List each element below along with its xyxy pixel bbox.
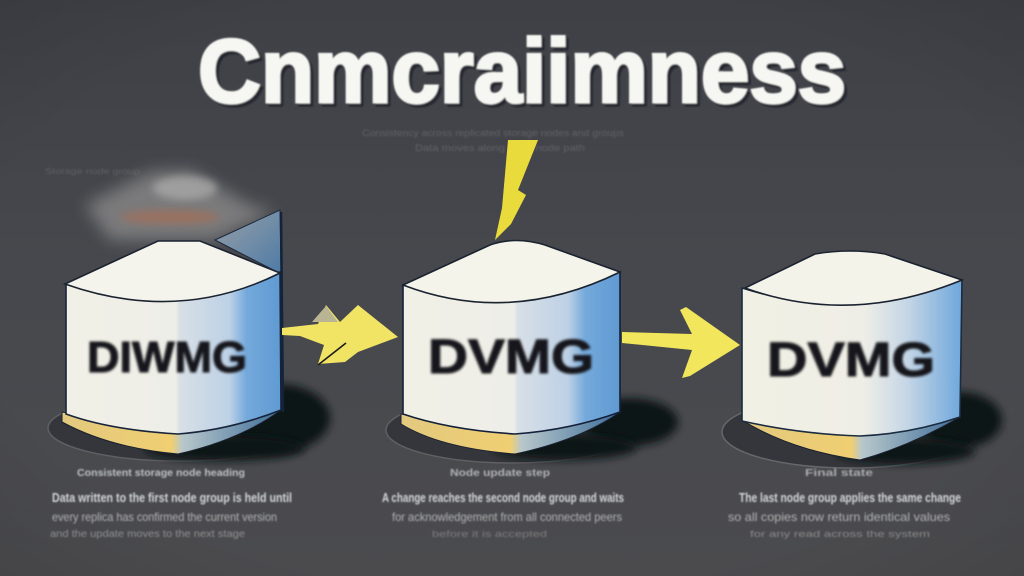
arrow 1: [282, 305, 398, 365]
caption column 3: [728, 468, 961, 539]
cube 1 front: [66, 272, 281, 434]
cube 2 label: DVMG: [428, 331, 594, 384]
arrow 2: [622, 307, 740, 378]
caption column 2: Node update step: [450, 468, 550, 479]
caption column 2: for acknowledgement from all connected peers: [392, 510, 622, 524]
subtitle: Consistency across replicated storage nodes and groups: [362, 128, 625, 138]
caption column 1: every replica has confirmed the current version: [52, 510, 277, 524]
subtitle: [362, 128, 625, 153]
cube 1 back face: [215, 210, 281, 274]
cube 1 label: DIWMG: [87, 333, 247, 382]
cube 3 top: [745, 251, 962, 305]
caption column 2: [382, 468, 624, 539]
cube 1 top: [65, 241, 280, 302]
title: Cnmcraiimness: [198, 22, 846, 122]
cube 2: [386, 240, 678, 463]
caption column 2: A change reaches the second node group and waits: [382, 490, 624, 505]
lightning bolt: [495, 140, 538, 240]
cube 3: [722, 251, 1002, 468]
side note left: Storage node group: [45, 167, 141, 176]
cube 3 front: [742, 280, 962, 436]
caption column 1: and the update moves to the next stage: [50, 529, 245, 540]
caption column 3: The last node group applies the same change: [739, 490, 961, 505]
caption column 1: Data written to the first node group is held until: [52, 490, 292, 505]
caption column 3: so all copies now return identical values: [728, 510, 950, 524]
smoke above first cube: [85, 170, 275, 240]
caption column 1: Consistent storage node heading: [77, 468, 245, 479]
cube 3 ground shadow: [722, 392, 1002, 468]
caption column 3: Final state: [805, 468, 874, 479]
caption column 2: before it is accepted: [432, 529, 547, 539]
cube 3 label: DVMG: [767, 334, 935, 387]
caption column 3: for any read across the system: [750, 529, 930, 539]
caption column 1: [50, 468, 292, 540]
cube 2 base: [401, 412, 620, 454]
cube 3 base: [742, 417, 960, 460]
subtitle: Data moves along each node path: [415, 143, 585, 153]
cube 1: [48, 210, 330, 461]
cube 1 right edge: [281, 212, 283, 412]
cube 2 top: [403, 240, 620, 303]
cube 2 front: [403, 272, 620, 434]
cube 1 base: [62, 410, 281, 454]
cube 1 ground shadow: [48, 384, 330, 461]
cube 2 ground shadow: [386, 397, 678, 463]
title: Cnmcraiimness: [201, 25, 849, 125]
